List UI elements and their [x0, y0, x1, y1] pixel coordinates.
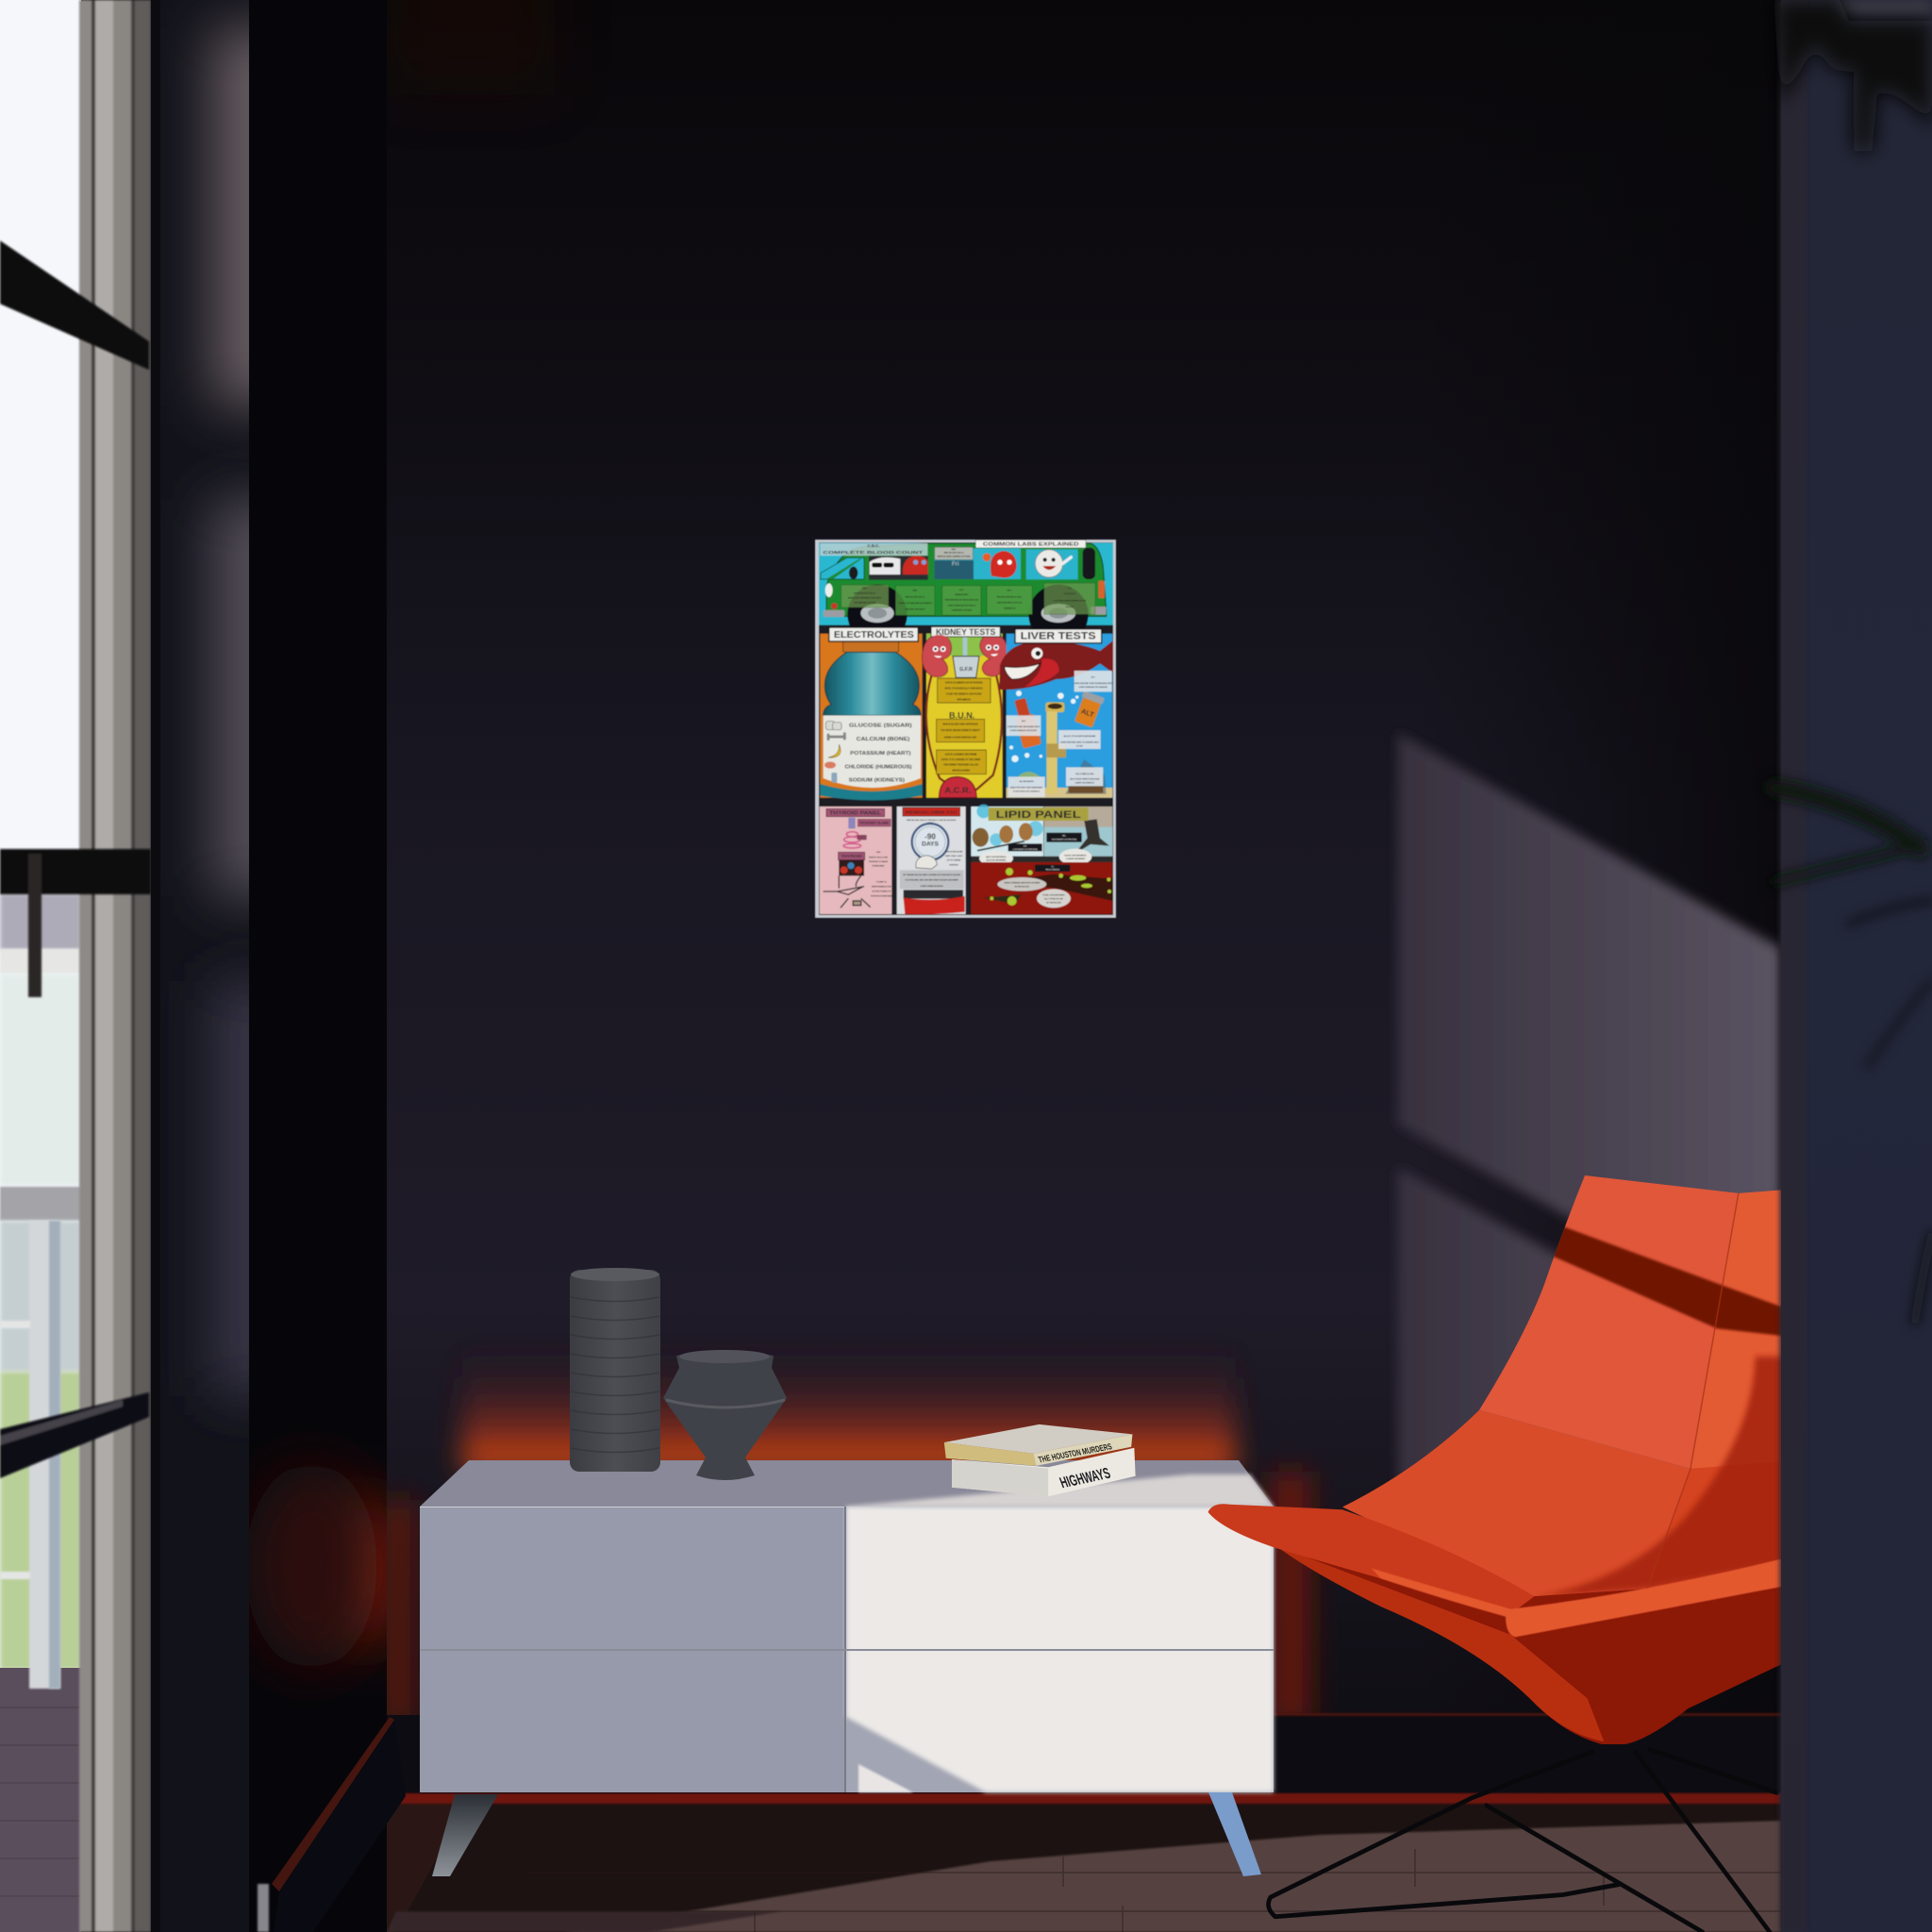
label: triglycerides: TG [1051, 867, 1055, 869]
orange lounge chair [1208, 1175, 1785, 1744]
icon: bus body [826, 543, 1107, 616]
baseboard [385, 1713, 1781, 1796]
text block: mcv: CARRIED IN [1004, 608, 1016, 610]
text block: alk phosphatase: LIVER ENZYME USED TO ASSESS BILE [1060, 741, 1099, 744]
cabinet [420, 1460, 1274, 1792]
left pillar [151, 0, 249, 1932]
text block: rbc: CARRY OXYGEN AND NUTRIENTS [898, 602, 932, 605]
icon: pituitary funnel [843, 818, 867, 848]
text block: alk phosphatase: FLOW [1076, 746, 1083, 748]
chair back left [1479, 1175, 1739, 1469]
text block: ast: LIVER DAMAGE OR INJURY [1010, 729, 1038, 732]
cabinet legs [432, 1792, 1261, 1876]
floor [313, 1792, 1781, 1932]
icon: alt pill bottle: ALT [1080, 707, 1095, 719]
icon: corridor figure [1044, 807, 1112, 857]
callout: small note: RED BLOOD CELLS [944, 553, 964, 555]
text block: wbc: INFECTION FIGHTERS THAT HELP [848, 596, 882, 599]
callout: small note [935, 547, 973, 559]
callout: ldl cloud: BAD CHOLESTEROL [986, 856, 1007, 858]
back wall [377, 0, 1792, 1811]
callout: triglycerides cloud [997, 877, 1046, 891]
callout: hdl cloud [1059, 849, 1091, 865]
text block: rbc [895, 586, 935, 615]
chair seat [1342, 1410, 1690, 1596]
chair underside [1275, 1541, 1785, 1744]
text block: callout: THEY ONLY LAST [945, 855, 963, 858]
icon: rear wheel [1028, 585, 1089, 644]
text block: alk phosphatase [1058, 730, 1101, 749]
text block: gfr: RATE. IT IS BASICALLY HOW MUCH [945, 687, 983, 690]
text block: callout [945, 851, 963, 866]
panel: thyroid panel [820, 807, 892, 914]
text block: mcv: AND HOW MUCH OF IT IS [997, 601, 1023, 604]
text block: globulin: GLOBULIN [1075, 774, 1094, 775]
sunlight patches on wall [1394, 734, 1781, 1477]
chair front lip [1208, 1504, 1535, 1614]
callout: small note: RBC [952, 549, 957, 551]
text block: plt [1044, 583, 1095, 614]
callout: ldl cloud: BLOCKS ARTERIES [987, 859, 1007, 862]
text block: gfr: PER MINUTE [957, 699, 971, 701]
window mullions [0, 241, 151, 1478]
text block: alt: LIVER ENZYME THAT INCREASES WITH [1074, 682, 1113, 685]
text block: alk phosphatase: ALK PHOSPHATASE [1063, 735, 1096, 738]
icon: window platelet [1026, 548, 1095, 579]
window view [0, 0, 81, 1932]
label: hdl: HIGH DENSITY LIPOPROTEIN [1052, 839, 1077, 841]
heading: common labs explained [975, 540, 1086, 548]
text block: gfr [938, 678, 991, 703]
text block: t4 t3: THYROID HORMONES [871, 895, 892, 897]
callout: triglycerides cloud: TRIGLYCERIDES ARE FATS STORED [1004, 881, 1041, 884]
icon: thyroid organ: THYROID [841, 854, 863, 858]
icon: window red cell with drink [934, 548, 1021, 579]
text block: bun: BUN IS BLOOD UREA NITROGEN [942, 723, 978, 725]
text block: wbc: WBC [862, 588, 868, 590]
panel: lipid panel [971, 805, 1112, 914]
icon: stopwatch [912, 823, 948, 860]
label: ldl [1008, 843, 1042, 851]
text block: t4 t3 [871, 881, 892, 897]
text block: acr: FOR KIDNEY PROTEINS CALLED [943, 764, 978, 767]
heading: complete blood count: C.B.C. [867, 543, 879, 548]
text block: bun [937, 719, 985, 742]
text block: rbc: RED BLOOD CELLS [906, 596, 925, 598]
icon: stopwatch: -90 [924, 832, 936, 841]
icon: left kidney [922, 635, 952, 677]
icon: gfr cup [953, 657, 979, 677]
text block: callout: MONTHS [949, 864, 958, 866]
heading: electrolytes: ELECTROLYTES [834, 630, 914, 641]
text block: albumin: FLUID IN BLOOD VESSELS [1013, 791, 1041, 793]
text block: acr: RATIO. IT IS LOOKING AT THE URINE [941, 758, 981, 761]
text block: mcv: MCV [1008, 590, 1012, 591]
heading: lipid panel [989, 808, 1089, 821]
text block: a1c: BY TAKING BLOOD AND LOOKING AT HOW MUCH SUGAR [903, 874, 960, 876]
text block: plt: CLOTTING RESPONDERS IN THE [1054, 600, 1087, 602]
icon: banana [828, 744, 841, 758]
blurred plant top right [1774, 0, 1932, 151]
short vase [663, 1350, 787, 1480]
text block: lifespan: RED BLOOD CELLS TYPICALLY LIVE 90-120 DAYS [907, 819, 957, 822]
text block: electrolytes label: GLUCOSE (SUGAR) [849, 724, 912, 729]
text block: tsh: HORMONES [873, 865, 885, 867]
icon: chicken [824, 761, 836, 769]
text block: a1c: OVER THREE MONTHS [921, 886, 943, 888]
panel: hemoglobin a1c [897, 807, 966, 914]
icon: acr bowl: A.C.R. [944, 785, 971, 794]
text block: ast: AST [1022, 720, 1026, 723]
label: triglycerides [1035, 865, 1070, 872]
callout: hdl cloud: CLEARS ARTERIES [1066, 858, 1086, 860]
orange glow behind cabinet [377, 1344, 1311, 1726]
tall vase [570, 1268, 660, 1472]
panel: blood count bus [819, 540, 1113, 644]
icon: tubes [926, 675, 1002, 791]
icon: sports drink bottle [820, 641, 923, 800]
text block: globulin: HELP FIGHT INFECTIONS AND [1070, 778, 1100, 781]
chair bright band [1372, 1558, 1785, 1637]
text block: wbc: WHITE BLOOD CELLS [854, 592, 876, 594]
text block: tsh: THYROID TO MAKE [869, 860, 889, 863]
text block: rbc: RBC [913, 591, 918, 592]
heading: liver tests: LIVER TESTS [1021, 631, 1096, 642]
heading: liver tests [1015, 629, 1102, 643]
top book: the houston murders: THE HOUSTON MURDERS [1037, 1442, 1113, 1465]
text block: bun: TOO MUCH MEANS KIDNEYS AREN'T [941, 729, 980, 732]
heading: bun: B.U.N. [949, 711, 974, 721]
icon: target tissue [824, 875, 871, 908]
heading: electrolytes [829, 627, 918, 641]
icon: whale [999, 641, 1113, 690]
heading: hemoglobin a1c: HEMOGLOBIN A1C [906, 809, 958, 815]
text block: hct: CARRYING OXYGEN [952, 609, 972, 612]
text block: electrolytes label: POTASSIUM (HEART) [850, 751, 911, 757]
icon: alt pill bottle [1073, 691, 1105, 728]
callout: triglycerides cloud: IN THE BLOOD [1015, 886, 1030, 888]
callout: total cholesterol cloud: ALL TYPES OF FAT [1044, 898, 1064, 901]
icon: bone [828, 734, 844, 740]
icon: window red cell with drink: Fri [952, 562, 959, 568]
right foreground column [1779, 0, 1932, 1932]
icon: character [916, 856, 937, 869]
heading: common labs explained: COMMON LABS EXPLAINED [983, 541, 1079, 547]
icon: seabed figures [1017, 759, 1107, 794]
text block: gfr: FLUID THE KIDNEYS CAN FILTER [946, 692, 982, 695]
text block: t4 t3: ACTIVE FORMS OF [872, 890, 891, 892]
label: pituitary gland: PITUITARY GLAND [859, 822, 890, 825]
text block: wbc: THE IMMUNE SYSTEM [854, 603, 875, 605]
text block: alt: LIVER DISEASE OR DAMAGE [1078, 686, 1108, 689]
text block: wbc [841, 585, 889, 608]
label: hdl: HDL [1062, 836, 1067, 838]
chair seam [1647, 1193, 1739, 1589]
text block: a1c [900, 870, 964, 889]
icon: bubbles [1009, 691, 1078, 762]
window frame [79, 0, 151, 1932]
text block: bun: DOING A GOOD ENOUGH JOB [944, 736, 976, 739]
text block: hct: HEMATOCRIT [955, 593, 969, 596]
label: triglycerides: TRIGLYCERIDES [1045, 870, 1060, 872]
poster frame [815, 540, 1116, 918]
icon: sugar cubes [825, 721, 841, 730]
icon: right kidney [980, 633, 1008, 676]
text block: tsh: WHICH TELLS THE [869, 857, 888, 858]
text block: hct [942, 586, 981, 615]
heading: lipid panel: LIPID PANEL [996, 809, 1081, 821]
text block: t4 t3: T3 AND T4 [876, 881, 888, 884]
icon: drain pipe [1045, 702, 1066, 794]
text block: acr [937, 750, 986, 774]
panel: liver tests [999, 629, 1113, 798]
callout: ldl cloud [979, 851, 1013, 866]
books [944, 1424, 1136, 1496]
chair shadows [1535, 1222, 1785, 1597]
icon: front wheel [847, 585, 908, 644]
heading: complete blood count [820, 543, 927, 556]
panel: kidney tests [922, 626, 1008, 798]
text block: callout: THIS IS BECAUSE [945, 851, 963, 854]
callout: small note: HEMOGLOBIN CARRIES OXYGEN [938, 555, 971, 558]
icon: blood bag [904, 890, 965, 914]
chair back right [1690, 1190, 1785, 1469]
text block: gfr: GFR IS GLOMERULAR FILTRATION [945, 681, 983, 684]
text block: ast [1007, 715, 1041, 736]
icon: gfr cup: G.F.R [959, 667, 973, 673]
text block: rbc: AROUND THE BODY [905, 608, 925, 610]
label: ldl: LDL [1024, 846, 1027, 848]
text block: electrolytes label [824, 715, 921, 788]
text block: mcv [987, 586, 1032, 614]
text block: hct: THAT IS RED BLOOD CELLS [948, 604, 976, 607]
text block: mcv: SHOWS HOW BIG A CELL [997, 595, 1023, 598]
panel: electrolytes [820, 627, 923, 800]
heading: kidney tests: KIDNEY TESTS [936, 627, 995, 637]
text block: t4 t3: RESPONSIBLE FOR [872, 887, 891, 889]
text block: alt: ALT [1091, 675, 1095, 678]
text block: ast: LIVER ENZYME RELEASED WITH [1008, 725, 1041, 728]
icon: acr bowl [939, 776, 976, 798]
text block: tsh [869, 852, 889, 867]
poster: common labs explained [815, 540, 1116, 918]
text block: callout: UP TO THREE [947, 860, 961, 862]
text block: hct: HCT [959, 590, 964, 591]
icon: window white and red cells [869, 556, 928, 580]
text block: acr: MICROALBUMIN [952, 769, 970, 772]
icon: ketchup bottle [1010, 697, 1041, 749]
callout: total cholesterol cloud: TOTAL CHOLESTEROL [1042, 894, 1066, 897]
bottom book: highways [952, 1448, 1136, 1496]
icon: stopwatch: DAYS [922, 841, 939, 848]
top book: the houston murders [944, 1424, 1132, 1466]
icon: monkeys scene [973, 805, 1043, 851]
text block: electrolytes label: CALCIUM (BONE) [857, 737, 909, 742]
icon: salt shaker [831, 773, 837, 783]
callout: hdl cloud: GOOD CHOLESTEROL [1064, 855, 1087, 857]
label: hdl [1046, 833, 1082, 842]
text block: globulin: CARRY NUTRIENTS [1074, 782, 1094, 785]
text block: a1c: IS ATTACHED, WE CAN SEE WHAT SUGAR HAS BEEN [906, 879, 958, 882]
callout: total cholesterol cloud [1037, 889, 1071, 908]
text block: globulin [1066, 767, 1103, 786]
chair right seat panel [1647, 1461, 1785, 1589]
text block: alt [1074, 671, 1113, 691]
icon: kidney overlap [933, 635, 949, 641]
chair legs [1269, 1749, 1777, 1932]
label: ldl: LOW DENSITY LIPOPROTEIN [1013, 849, 1038, 851]
text block: hct: PERCENTAGE OF WHOLE BLOOD [945, 599, 978, 602]
text block: albumin [1008, 776, 1045, 797]
text block: albumin: ALBUMIN [1019, 780, 1034, 783]
heading: thyroid panel: THYROID PANEL [829, 810, 882, 816]
icon: blood vessel scene [971, 862, 1112, 914]
text block: tsh: TSH [876, 852, 881, 854]
text block: plt: PLT [1068, 588, 1073, 590]
text block: albumin: MAIN PROTEIN THAT MAINTAINS [1010, 787, 1043, 790]
icon: bus details [821, 558, 1107, 617]
dark column with glow [245, 0, 406, 1932]
bottom book: highways: HIGHWAYS [1058, 1465, 1113, 1492]
text block: electrolytes label: CHLORIDE (HUMEROUS) [844, 765, 912, 771]
callout: total cholesterol cloud: IN THE BLOOD [1046, 903, 1061, 905]
text block: plt: PLATELETS [1064, 592, 1076, 595]
text block: electrolytes label: SODIUM (KIDNEYS) [849, 777, 905, 783]
blurred plant right [1774, 788, 1932, 1321]
text block: plt: BLOOD [1066, 607, 1074, 608]
heading: complete blood count: COMPLETE BLOOD COUNT [823, 550, 923, 556]
text block: acr: ACR IS ALBUMIN CREATININE [945, 753, 977, 756]
